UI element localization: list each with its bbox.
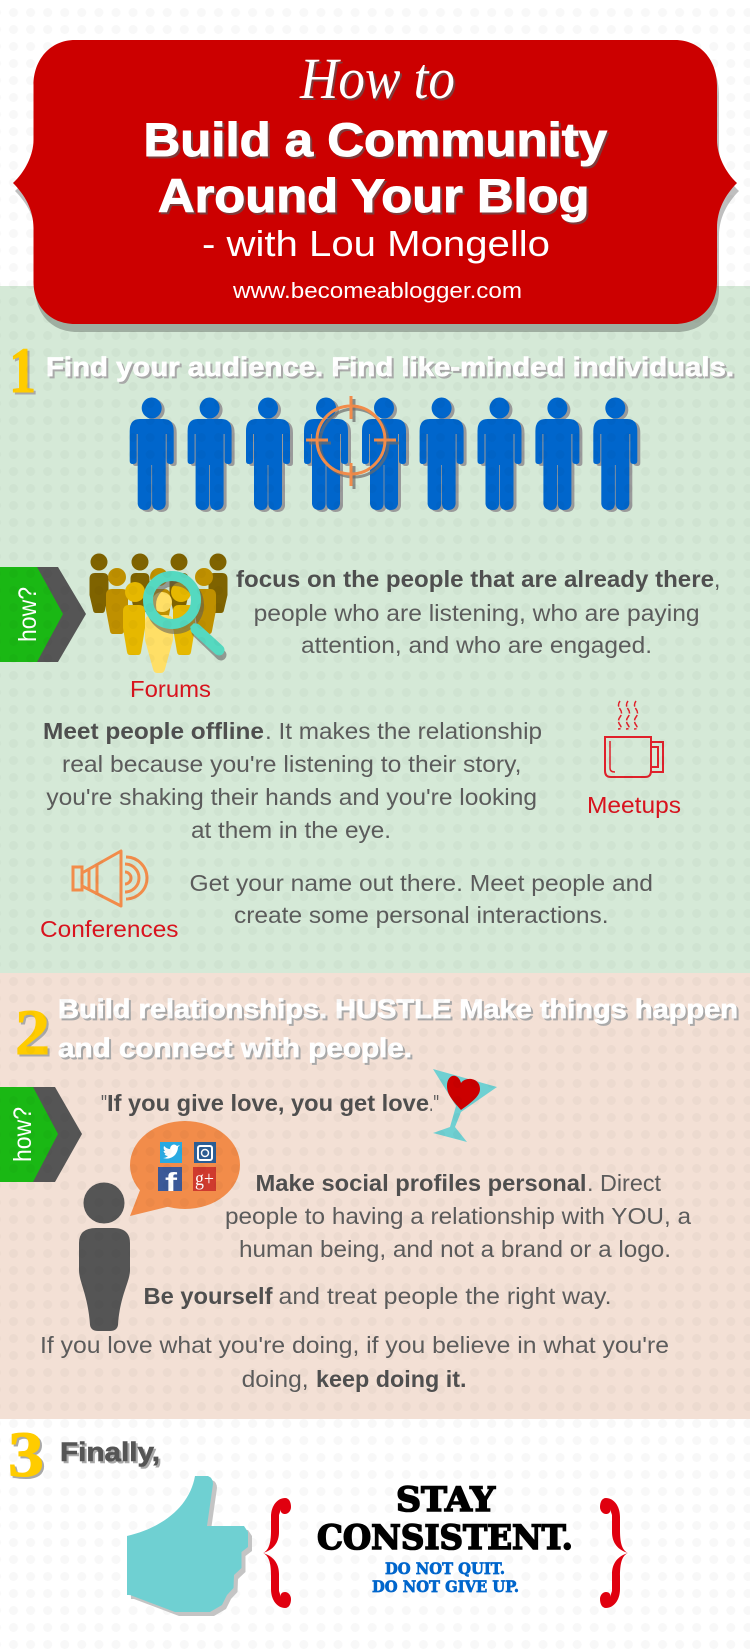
quote: if you give love: ." (429, 1090, 439, 1116)
callout: stay consistent: DO NOT QUIT. (385, 1559, 505, 1578)
text block: focus on the people: , (714, 566, 720, 592)
text block: be yourself: Be yourself (144, 1283, 273, 1309)
text block: focus on the people: attention, and who are engaged. (301, 632, 652, 658)
text block: get your name out there (190, 870, 653, 928)
heading: step 2: Build relationships. HUSTLE Make things happen (58, 994, 738, 1024)
icon: crowd with magnifying glass (90, 554, 228, 673)
text block: meet people offline: . It makes the relationship (265, 718, 542, 744)
icon: orange crosshair target (306, 396, 399, 489)
text block: make social profiles personal: . Direct (587, 1170, 662, 1196)
callout: stay consistent: STAY (396, 1480, 496, 1520)
text block: make social profiles personal: Make social profiles personal (256, 1170, 586, 1196)
heading: finally: Finally, (60, 1437, 160, 1467)
text block: make social profiles personal: human being, and not a brand or a logo. (239, 1236, 671, 1262)
numeral 2: 2 (15, 997, 50, 1069)
text block: keep doing it (40, 1332, 669, 1392)
label: Meetups: Meetups (587, 792, 681, 818)
text block: be yourself: and treat people the right way. (278, 1283, 612, 1309)
panel: step 2 build relationships (0, 973, 750, 1419)
heading: step 1: Find your audience. Find like-minded individuals. (46, 352, 734, 382)
panel: step 3 finally (8, 1419, 628, 1616)
icon: person with social media speech bubble: g+ (195, 1168, 214, 1190)
icon: coffee mug with steam (605, 701, 663, 777)
text block: keep doing it: doing, (242, 1366, 309, 1392)
title: build a community around your blog: Build a Community (144, 113, 607, 166)
text block: meet people offline: real because you're listening to their story, (62, 751, 522, 777)
text block: keep doing it: If you love what you're doing, if you believe in what you're (40, 1332, 669, 1358)
text block: focus on the people (236, 566, 720, 658)
icon: row of nine blue people (130, 398, 640, 512)
panel: title banner (13, 40, 739, 332)
icon: megaphone speaker (73, 851, 147, 906)
text block: meet people offline: Meet people offline (43, 718, 264, 744)
title: build a community around your blog: Around Your Blog (158, 169, 590, 222)
left curly brace (263, 1498, 291, 1608)
heading: step 2 (58, 994, 738, 1063)
text block: meet people offline: you're shaking their hands and you're looking (46, 784, 537, 810)
text block: keep doing it: keep doing it. (316, 1366, 466, 1392)
arrow: how? tab step 1 (0, 567, 86, 662)
subtitle: with Lou Mongello: - with Lou Mongello (202, 223, 550, 264)
heading: step 2: and connect with people. (58, 1033, 412, 1063)
icon: person with social media speech bubble (79, 1121, 240, 1331)
text block: get your name out there: Get your name out there. Meet people and (190, 870, 653, 896)
arrow: how? tab step 1: how? (14, 587, 42, 642)
icon: cocktail glass with heart (433, 1069, 497, 1142)
quote: if you give love: " (101, 1090, 107, 1116)
text block: get your name out there: create some personal interactions. (234, 902, 609, 928)
arrow: how? tab step 2: how? (9, 1107, 37, 1162)
text block: focus on the people: focus on the people that are already there (236, 566, 714, 592)
quote: if you give love: If you give love, you get love (107, 1090, 429, 1116)
text block: meet people offline: at them in the eye. (191, 817, 391, 843)
title: how to: How to (299, 46, 455, 111)
text block: make social profiles personal: people to having a relationship with YOU, a (225, 1203, 691, 1229)
icon: thumbs up (127, 1476, 252, 1616)
callout: stay consistent: DO NOT GIVE UP. (372, 1577, 519, 1596)
numeral 3: 3 (8, 1419, 44, 1491)
numeral 1: 1 (9, 335, 36, 407)
arrow: how? tab step 2 (0, 1087, 82, 1182)
label: Conferences: Conferences (40, 916, 178, 942)
text block: meet people offline (43, 718, 542, 843)
right curly brace (600, 1498, 628, 1608)
website url: www.becomeablogger.com (232, 278, 522, 303)
callout: stay consistent: CONSISTENT. (317, 1518, 573, 1558)
text block: be yourself (144, 1283, 612, 1309)
text block: focus on the people: people who are listening, who are paying (254, 600, 700, 626)
text block: make social profiles personal (225, 1170, 691, 1262)
label: Forums: Forums (130, 676, 211, 702)
title: build a community around your blog (144, 113, 607, 222)
icon: person with social media speech bubble: f (165, 1167, 177, 1197)
panel: step 1 find your audience (0, 286, 750, 973)
callout: stay consistent (317, 1480, 573, 1596)
